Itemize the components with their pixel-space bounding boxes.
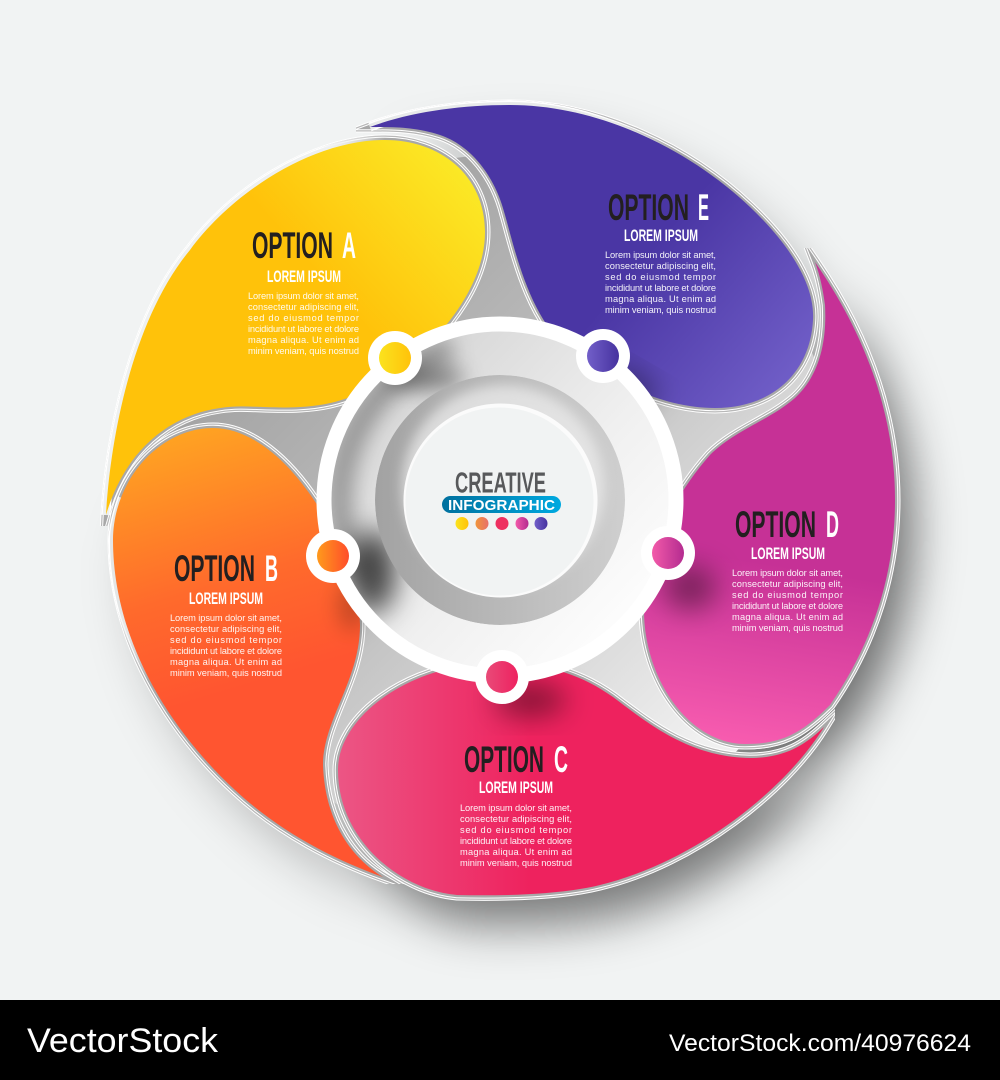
text: option B: Lorem ipsum dolor sit amet, — [170, 613, 282, 623]
text: option B: incididunt ut labore et dolore — [170, 646, 282, 656]
text: option C: incididunt ut labore et dolore — [460, 836, 572, 846]
center colour dots — [456, 517, 548, 530]
text: option C: OPTION — [464, 739, 544, 780]
central star backdrop — [155, 155, 845, 845]
node D — [641, 526, 695, 580]
text: option A: magna aliqua. Ut enim ad — [248, 335, 359, 345]
panel: option C — [338, 663, 824, 895]
text: option B: B — [265, 548, 278, 589]
footer bar — [0, 1000, 1000, 1080]
text: option D: incididunt ut labore et dolore — [732, 601, 843, 611]
text: option D: D — [826, 504, 839, 545]
text: option E: consectetur adipiscing elit, — [605, 261, 716, 271]
middle recessed band — [375, 375, 625, 625]
title pill: infographic: INFOGRAPHIC — [448, 497, 555, 514]
text: option D: magna aliqua. Ut enim ad — [732, 612, 843, 622]
text: option D — [732, 504, 843, 633]
title: creative: CREATIVE — [455, 468, 546, 500]
text: option E: magna aliqua. Ut enim ad — [605, 294, 716, 304]
text: option B: LOREM IPSUM — [189, 590, 263, 608]
text: option C: sed do eiusmod tempor — [460, 825, 572, 835]
text: option A: Lorem ipsum dolor sit amet, — [248, 291, 359, 301]
panel: option D — [644, 262, 895, 744]
text: option E: minim veniam, quis nostrud — [605, 305, 716, 315]
ring interior with shading — [330, 330, 670, 670]
panel: option A — [106, 140, 485, 515]
text: option C: minim veniam, quis nostrud — [460, 858, 572, 868]
text: option A: sed do eiusmod tempor — [248, 313, 359, 323]
text: option D: sed do eiusmod tempor — [732, 590, 843, 600]
center disc — [404, 404, 598, 598]
footer bar: VectorStock — [27, 1022, 219, 1060]
text: option D: Lorem ipsum dolor sit amet, — [732, 568, 843, 578]
text: option B — [170, 548, 282, 678]
text: option A — [248, 225, 359, 356]
text: option E: incididunt ut labore et dolore — [605, 283, 716, 293]
text: option D: LOREM IPSUM — [751, 545, 825, 563]
text: option D: consectetur adipiscing elit, — [732, 579, 843, 589]
panel: option E — [370, 105, 813, 408]
text: option E: Lorem ipsum dolor sit amet, — [605, 250, 716, 260]
text: option C — [460, 739, 572, 868]
soft drop shadows under the wheel — [131, 135, 913, 925]
text: option C: LOREM IPSUM — [479, 779, 553, 797]
text: option B: sed do eiusmod tempor — [170, 635, 282, 645]
panel: option B — [113, 428, 383, 877]
text: option D: OPTION — [735, 504, 816, 545]
text: option E: LOREM IPSUM — [624, 227, 698, 245]
node shadows cast on the panels — [338, 363, 716, 716]
text: option A: incididunt ut labore et dolore — [248, 324, 359, 334]
text: option C: Lorem ipsum dolor sit amet, — [460, 803, 572, 813]
text: option E: OPTION — [608, 187, 689, 228]
text: option A: minim veniam, quis nostrud — [248, 346, 359, 356]
node E — [576, 329, 630, 383]
text: option B: OPTION — [174, 548, 255, 589]
node C — [475, 650, 529, 704]
text: option E: sed do eiusmod tempor — [605, 272, 716, 282]
text: option C: C — [554, 739, 568, 780]
node A — [368, 331, 422, 385]
white ring — [324, 324, 676, 676]
text: option E — [605, 187, 716, 315]
text: option A: consectetur adipiscing elit, — [248, 302, 359, 312]
node B — [306, 529, 360, 583]
text: option C: magna aliqua. Ut enim ad — [460, 847, 572, 857]
text: option B: minim veniam, quis nostrud — [170, 668, 282, 678]
text: option B: magna aliqua. Ut enim ad — [170, 657, 282, 667]
text: option E: E — [698, 187, 709, 228]
text: option B: consectetur adipiscing elit, — [170, 624, 282, 634]
option D lower edge overlapping the tip of option C — [700, 709, 830, 750]
text: option D: minim veniam, quis nostrud — [732, 623, 843, 633]
text: option A: LOREM IPSUM — [267, 268, 341, 286]
text: option A: OPTION — [252, 225, 333, 266]
text: option A: A — [342, 225, 356, 266]
footer bar: VectorStock.com/40976624 — [669, 1030, 971, 1057]
text: option C: consectetur adipiscing elit, — [460, 814, 572, 824]
